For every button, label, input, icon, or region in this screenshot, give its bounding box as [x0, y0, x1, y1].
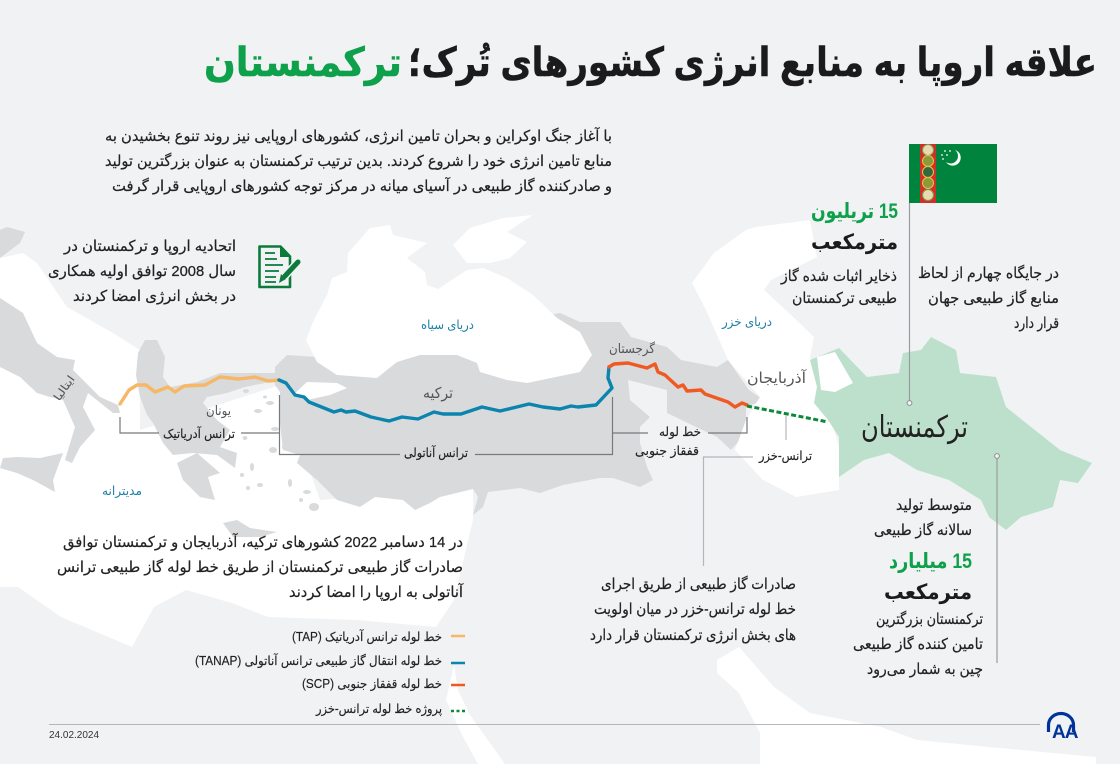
brackets: pipeline labels [120, 395, 786, 566]
stat: proven reserves [780, 200, 898, 307]
sea: Black Sea [306, 225, 592, 383]
pipeline: SCP [609, 363, 747, 407]
stat: proven reserves: 15 تریلیون [811, 200, 898, 223]
text: fourth rank: در جایگاه چهارم از لحاظ [918, 264, 1059, 282]
text: Trans-Caspian priority [590, 575, 796, 644]
island: Sicily [0, 453, 63, 492]
stat: annual production: چین به شمار می‌رود [867, 661, 983, 678]
stat: annual production [853, 497, 983, 678]
stat: annual production: متوسط تولید [896, 497, 972, 514]
labels: pipelines: ترانس آناتولی [404, 445, 468, 461]
sea: Azov [453, 215, 533, 263]
callout line: flag to Turkmenistan [907, 203, 912, 405]
labels: countries and seas: دریای سیاه [421, 318, 474, 333]
labels: pipelines: ترانس آدریاتیک [163, 426, 235, 442]
legend: خط لوله قفقاز جنوبی (SCP) [302, 677, 442, 692]
country: Turkey and Caucasus [275, 313, 764, 515]
title: ترکمنستان [204, 41, 402, 86]
labels: pipelines: خط لوله [659, 425, 701, 440]
date: 24.02.2024 [49, 730, 99, 741]
labels: countries and seas: دریای خزر [721, 315, 772, 330]
intro paragraph: منابع تامین انرژی خود را شروع کردند. بدین ترتیب ترکمنستان به عنوان بزرگترین تولید [105, 152, 612, 170]
text: 2008 agreement: سال 2008 توافق اولیه همکاری [48, 263, 236, 280]
sea: Red Sea [446, 665, 505, 764]
labels: pipelines: قفقاز جنوبی [635, 444, 699, 459]
text: December 2022 agreement: در 14 دسامبر 2022 کشورهای ترکیه، آذربایجان و ترکمنستان توافق [63, 533, 463, 551]
stat: annual production: 15 میلیارد [889, 550, 972, 573]
labels: countries and seas: یونان [206, 403, 231, 419]
callout line: production [995, 454, 999, 663]
map: base geography [0, 215, 1096, 764]
text: Trans-Caspian priority: صادرات گاز طبیعی از طریق اجرای [601, 575, 796, 593]
text: December 2022 agreement: آناتولی به اروپا را امضا کردند [289, 583, 464, 602]
pipeline: Trans-Caspian [747, 406, 828, 422]
labels: countries and seas: ترکمنستان [861, 411, 968, 444]
stat: proven reserves: طبیعی ترکمنستان [792, 290, 897, 307]
labels: pipelines: ترانس-خزر [758, 449, 812, 464]
intro paragraph: و صادرکننده گاز طبیعی در آسیای میانه در مرکز توجه کشورهای اروپایی قرار گرفت [112, 177, 612, 196]
sea: Mediterranean [0, 253, 473, 647]
sea: Kara-Bogaz [817, 352, 853, 392]
icon: document with pen [260, 246, 298, 287]
intro paragraph [105, 127, 612, 196]
sea: Marmara [293, 382, 347, 400]
labels: countries and seas: آذربایجان [747, 369, 807, 387]
stat: proven reserves: ذخایر اثبات شده گاز [780, 267, 897, 285]
legend: خط لوله انتقال گاز طبیعی ترانس آناتولی (TANAP) [195, 653, 442, 669]
stat: annual production: مترمکعب [884, 581, 972, 604]
stat: annual production: سالانه گاز طبیعی [874, 521, 972, 539]
text: Trans-Caspian priority: خط لوله ترانس-خزر در میان اولویت [594, 601, 796, 618]
stat: annual production: تامین کننده گاز طبیعی [853, 635, 983, 653]
island: Crete [223, 520, 277, 537]
intro paragraph: با آغاز جنگ اوکراین و بحران تامین انرژی، کشورهای اروپایی نیز روند تنوع بخشیدن به [105, 127, 612, 146]
labels: pipelines [163, 425, 812, 464]
text: fourth rank: منابع گاز طبیعی جهان [928, 289, 1059, 307]
text: fourth rank [918, 264, 1059, 332]
sea: Persian Gulf [717, 647, 1096, 764]
legend: پروژه خط لوله ترانس-خزر [315, 702, 442, 717]
labels: countries and seas: مدیترانه [102, 484, 142, 499]
country: Albania and Greece [136, 340, 277, 468]
text: fourth rank: قرار دارد [1014, 315, 1059, 332]
sea: Caspian [692, 220, 839, 497]
logo: AA: AA [1052, 722, 1079, 743]
labels: countries and seas: ترکیه [423, 385, 453, 402]
text: Trans-Caspian priority: های بخش انرژی ترکمنستان قرار دارد [590, 627, 796, 644]
labels: countries and seas: ایتالیا [52, 374, 78, 403]
stat: annual production: ترکمنستان بزرگترین [876, 610, 983, 628]
text: December 2022 agreement [57, 533, 464, 602]
region: Peloponnese [177, 453, 220, 500]
text: 2008 agreement [48, 238, 236, 305]
pipeline: TANAP [279, 367, 612, 421]
text: December 2022 agreement: صادرات گاز طبیعی ترکمنستان از طریق خط لوله گاز طبیعی ترانس [57, 558, 463, 576]
footer rule [49, 724, 1040, 726]
country: Turkmenistan [810, 337, 1092, 530]
islands: Aegean [240, 389, 319, 511]
legend [195, 629, 465, 717]
region: Italian north [0, 227, 25, 258]
text: 2008 agreement: در بخش انرژی امضا کردند [73, 288, 236, 305]
country: Italy [0, 298, 120, 463]
text: 2008 agreement: اتحادیه اروپا و ترکمنستان در [63, 238, 236, 256]
icon: Turkmenistan flag [909, 144, 997, 203]
pipeline: TAP [120, 377, 279, 404]
labels: countries and seas: گرجستان [609, 341, 656, 357]
logo: AA [1048, 714, 1079, 743]
stat: proven reserves: مترمکعب [811, 231, 898, 254]
legend: خط لوله ترانس آدریاتیک (TAP) [292, 629, 442, 645]
labels: countries and seas [52, 315, 968, 499]
